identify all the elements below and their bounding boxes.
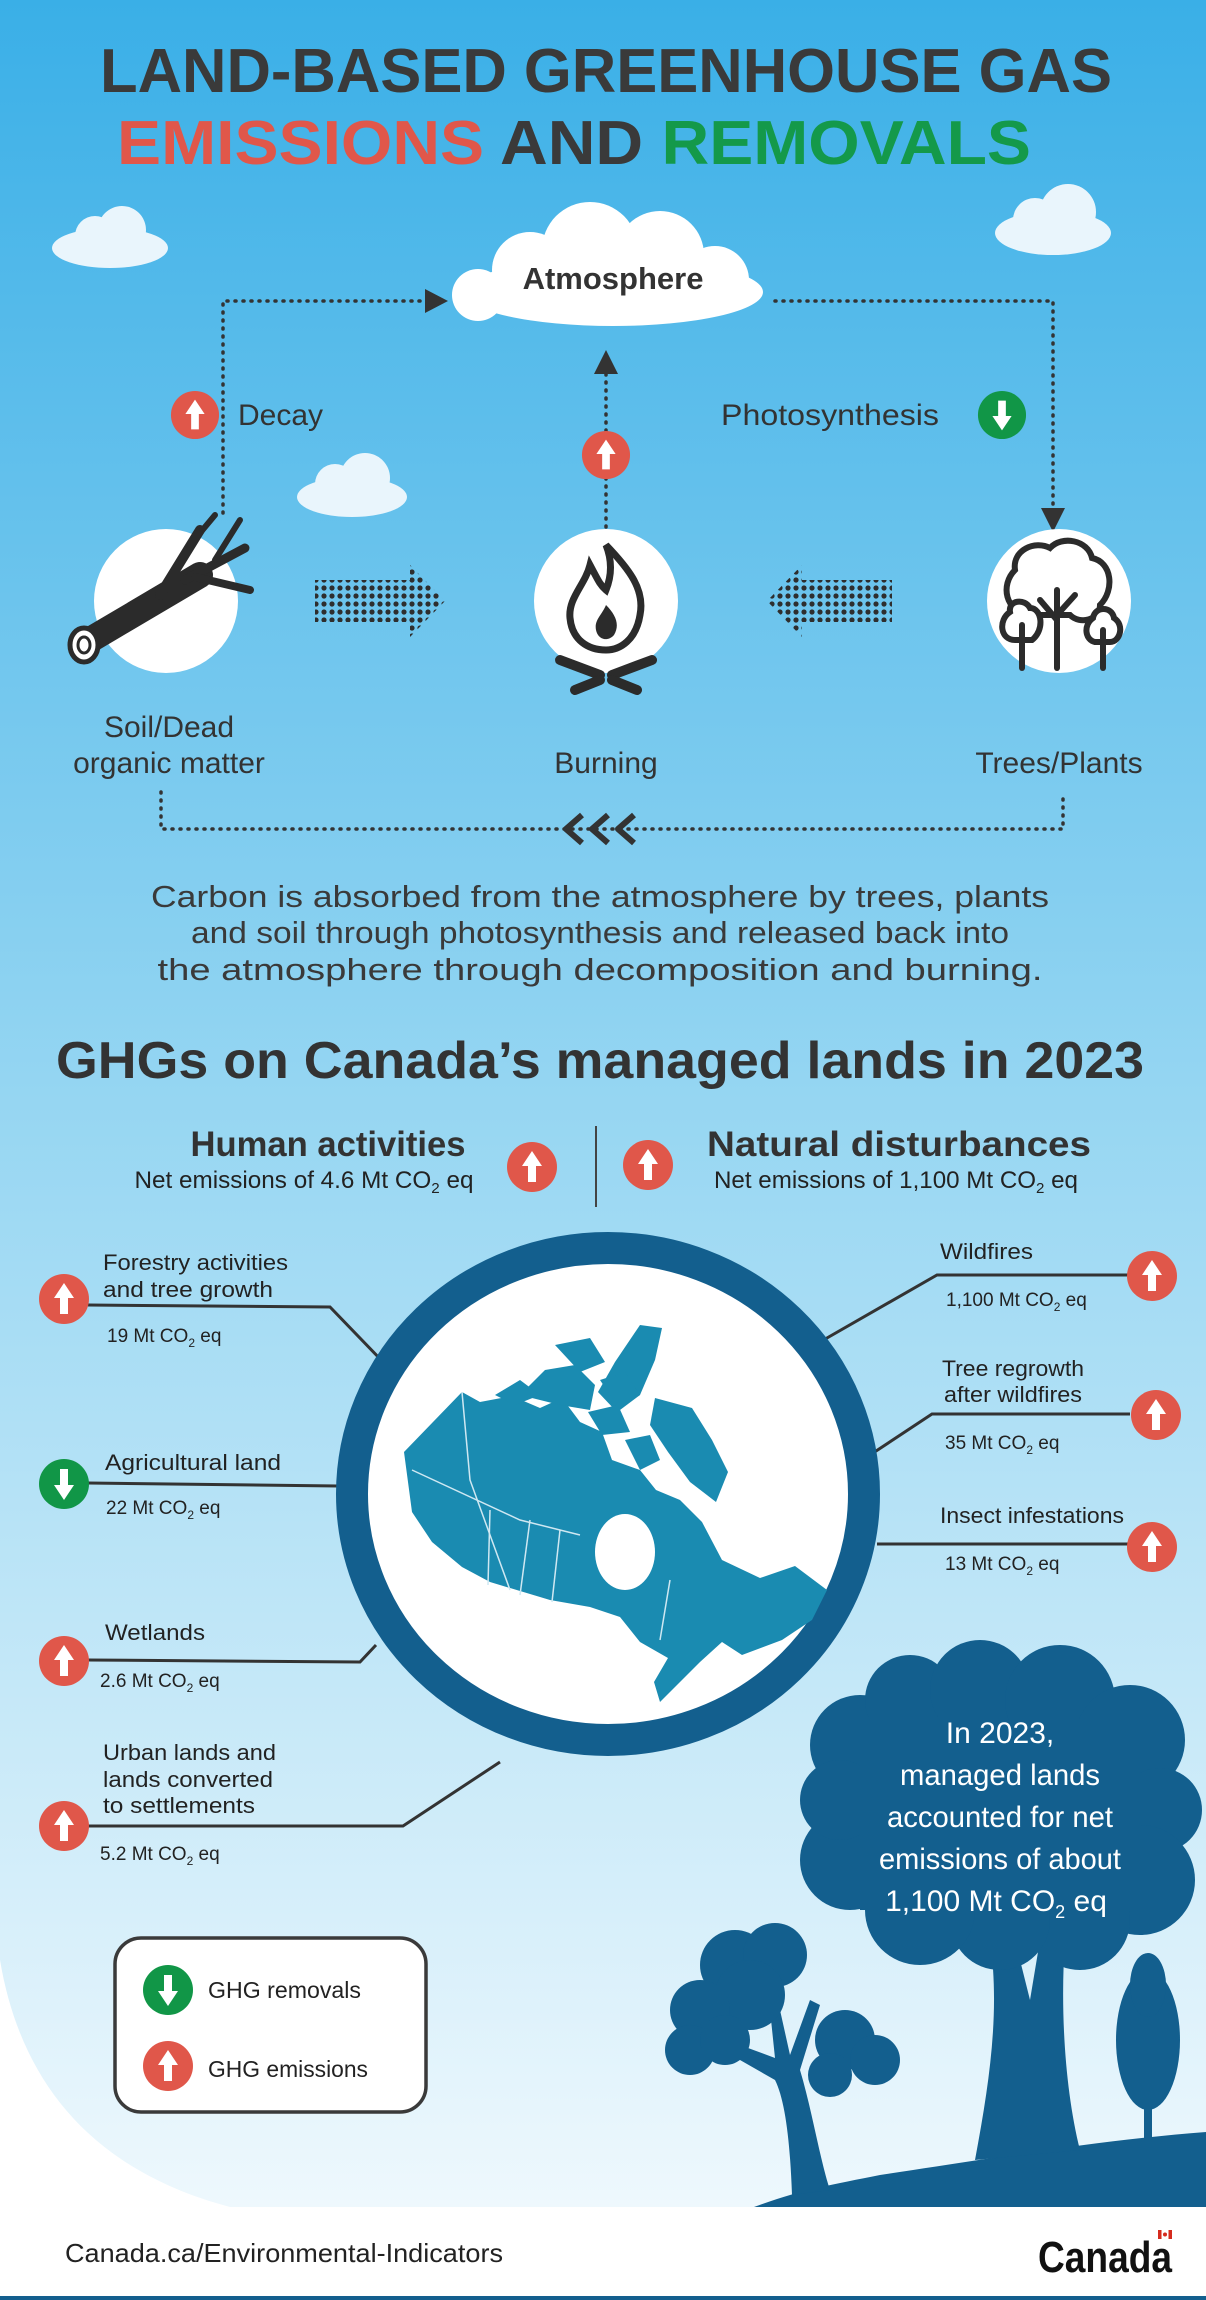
item: insect infestations bbox=[940, 1503, 1177, 1578]
item: wetlands: eq bbox=[193, 1671, 220, 1692]
item: wetlands: 2 bbox=[187, 1681, 194, 1695]
item: tree regrowth: 2 bbox=[1026, 1443, 1033, 1457]
arrow: halftone trees to burning bbox=[767, 565, 892, 637]
callout: tree text: managed lands bbox=[900, 1759, 1100, 1792]
arrow: decay path to atmosphere bbox=[223, 289, 448, 513]
summary: human activities: 2 bbox=[431, 1180, 440, 1197]
callout: tree text: eq bbox=[1065, 1885, 1107, 1918]
label: decay: Decay bbox=[238, 399, 323, 432]
summary: natural disturbances bbox=[623, 1125, 1091, 1197]
heading: GHGs on managed lands: GHGs on Canada’s managed lands in 2023 bbox=[56, 1032, 1144, 1090]
arrow: burning to atmosphere bbox=[594, 350, 618, 543]
text: carbon cycle description: Carbon is absorbed from the atmosphere by trees, plants bbox=[151, 879, 1049, 914]
item: urban lands: 5.2 Mt CO bbox=[100, 1844, 187, 1865]
item: urban lands: 2 bbox=[187, 1854, 194, 1868]
title: EMISSIONS AND REMOVALS bbox=[117, 109, 1031, 178]
callout: tree text: 2 bbox=[1055, 1902, 1065, 1922]
item: forestry: Forestry activities bbox=[103, 1250, 288, 1275]
item: agricultural land: Agricultural land bbox=[105, 1450, 281, 1475]
summary: natural disturbances: Net emissions of 1,100 Mt CO bbox=[714, 1167, 1034, 1194]
arrow: atmosphere to trees bbox=[775, 301, 1065, 532]
summary: natural disturbances: Natural disturbances bbox=[707, 1125, 1091, 1164]
callout: tree text: emissions of about bbox=[879, 1843, 1122, 1876]
footer url: Canada.ca/Environmental-Indicators bbox=[65, 2238, 503, 2268]
item: insect infestations: 2 bbox=[1026, 1564, 1033, 1578]
callout: tree text: In 2023, bbox=[946, 1717, 1054, 1750]
title: LAND-BASED GREENHOUSE GAS bbox=[100, 37, 1112, 106]
item: insect infestations: 13 Mt CO bbox=[945, 1554, 1026, 1575]
item: forestry: 19 Mt CO bbox=[107, 1326, 188, 1347]
item: wildfires bbox=[940, 1239, 1177, 1314]
icon: burning emission bbox=[582, 431, 630, 479]
callout: tree text: 1,100 Mt CO bbox=[885, 1885, 1055, 1918]
item: tree regrowth: Tree regrowth bbox=[942, 1356, 1084, 1381]
illustration: trees and hill bbox=[665, 1640, 1206, 2207]
summary: natural disturbances: 2 bbox=[1036, 1180, 1044, 1197]
item: wildfires: 1,100 Mt CO bbox=[946, 1290, 1054, 1311]
summary: human activities bbox=[134, 1125, 557, 1197]
callout: tree text: accounted for net bbox=[887, 1801, 1114, 1834]
title bbox=[100, 37, 1112, 178]
atmosphere cloud bbox=[452, 202, 763, 326]
item: tree regrowth: 35 Mt CO bbox=[945, 1433, 1026, 1454]
callout: tree text bbox=[879, 1717, 1122, 1922]
item: forestry bbox=[39, 1250, 288, 1350]
label: photosynthesis: Photosynthesis bbox=[721, 399, 939, 432]
item: wildfires: 2 bbox=[1054, 1300, 1061, 1314]
label: soil: Soil/Dead bbox=[104, 711, 234, 744]
item: tree regrowth: eq bbox=[1033, 1433, 1059, 1454]
item: urban lands: eq bbox=[193, 1844, 220, 1865]
legend: GHG removals bbox=[208, 1977, 361, 2003]
item: forestry: and tree growth bbox=[103, 1277, 273, 1302]
item: tree regrowth bbox=[942, 1356, 1181, 1457]
item: wildfires: Wildfires bbox=[940, 1239, 1033, 1264]
text: carbon cycle description bbox=[151, 879, 1049, 987]
summary: natural disturbances: eq bbox=[1044, 1167, 1078, 1194]
item: urban lands: Urban lands and bbox=[103, 1740, 276, 1765]
label: decay bbox=[171, 391, 323, 439]
item: agricultural land: eq bbox=[194, 1498, 220, 1519]
item: wetlands: Wetlands bbox=[105, 1620, 205, 1645]
text: carbon cycle description: and soil through photosynthesis and released back into bbox=[191, 915, 1009, 950]
item: insect infestations: eq bbox=[1033, 1554, 1059, 1575]
divider bbox=[595, 1126, 597, 1207]
summary: human activities: eq bbox=[440, 1167, 474, 1194]
item: wildfires: eq bbox=[1060, 1290, 1087, 1311]
icon: burning fire bbox=[534, 529, 678, 690]
atmosphere cloud: Atmosphere bbox=[523, 261, 703, 296]
summary: human activities: Net emissions of 4.6 Mt CO bbox=[134, 1167, 428, 1194]
map: canada bbox=[404, 1325, 827, 1702]
summary: human activities: Human activities bbox=[190, 1125, 466, 1164]
item: agricultural land: 22 Mt CO bbox=[106, 1498, 187, 1519]
label: soil: organic matter bbox=[73, 747, 265, 780]
item: wetlands: 2.6 Mt CO bbox=[100, 1671, 187, 1692]
label: burning: Burning bbox=[554, 747, 658, 780]
arrow: bottom return loop bbox=[161, 792, 1063, 843]
item: wetlands bbox=[39, 1620, 220, 1695]
item: agricultural land bbox=[39, 1450, 281, 1522]
decorative clouds bbox=[52, 184, 1111, 517]
item: urban lands bbox=[39, 1740, 276, 1868]
item: urban lands: lands converted bbox=[103, 1767, 273, 1792]
item: forestry: eq bbox=[195, 1326, 221, 1347]
item: agricultural land: 2 bbox=[187, 1508, 194, 1522]
logo: Canada wordmark: Canada bbox=[1038, 2233, 1172, 2282]
arrow: halftone soil to burning bbox=[315, 565, 445, 637]
item: forestry: 2 bbox=[188, 1336, 195, 1350]
map circle bbox=[352, 1248, 864, 1740]
legend bbox=[115, 1938, 426, 2112]
icon: soil dead organic matter bbox=[70, 515, 250, 673]
item: urban lands: to settlements bbox=[103, 1793, 255, 1818]
item: tree regrowth: after wildfires bbox=[944, 1382, 1082, 1407]
connector lines bbox=[88, 1275, 1130, 1826]
icon: trees bbox=[987, 529, 1131, 673]
item: insect infestations: Insect infestations bbox=[940, 1503, 1124, 1528]
text: carbon cycle description: the atmosphere through decomposition and burning. bbox=[158, 952, 1042, 987]
label: photosynthesis bbox=[721, 391, 1026, 439]
legend: GHG emissions bbox=[208, 2056, 368, 2082]
label: trees plants: Trees/Plants bbox=[975, 747, 1143, 780]
